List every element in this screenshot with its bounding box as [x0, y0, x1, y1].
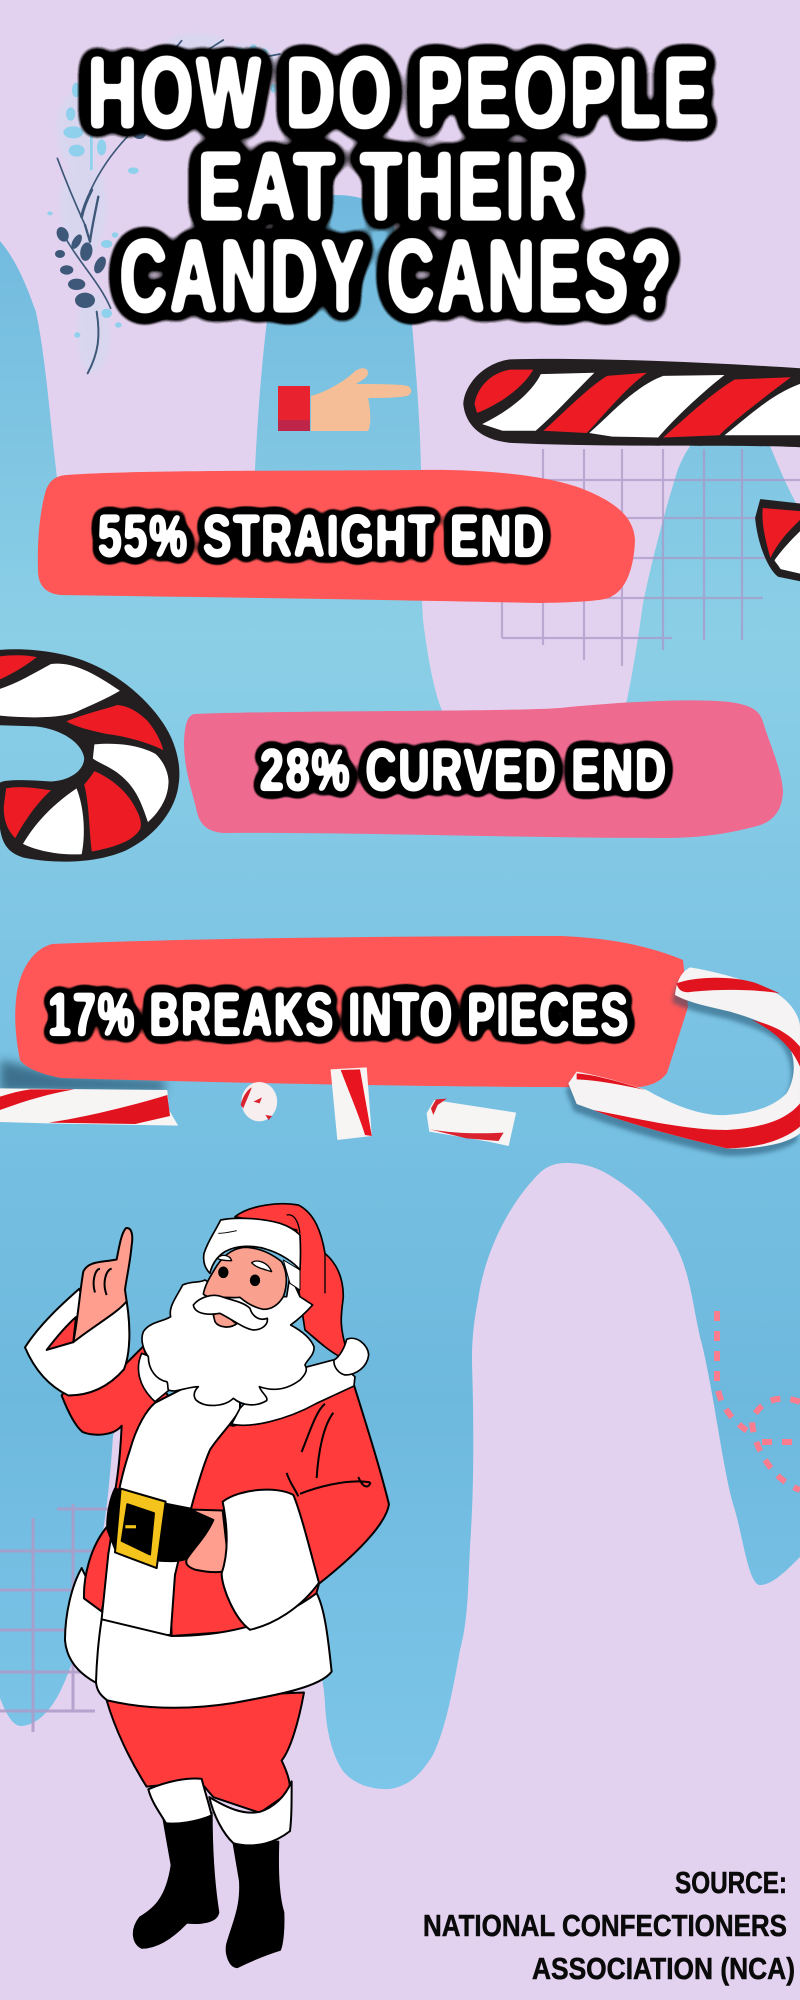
candy piece tilted — [427, 1099, 516, 1146]
eyebrows — [217, 1255, 272, 1272]
icon: candy cane fragment right — [755, 499, 800, 581]
item text: 55% straight end: 55% STRAIGHT END — [98, 504, 546, 569]
title — [88, 37, 712, 333]
left hem fur — [65, 1568, 107, 1683]
title: EAT THEIR — [198, 133, 580, 240]
buckle — [115, 1489, 166, 1568]
right collar — [232, 1360, 355, 1425]
sleeve cuff — [222, 1490, 319, 1630]
Santa body — [25, 1228, 389, 1967]
beard — [142, 1275, 314, 1405]
hand on belt — [186, 1509, 234, 1572]
Santa head — [138, 1204, 369, 1425]
grid pattern lower left — [0, 1504, 110, 1732]
right boot — [227, 1842, 283, 1967]
eyes — [219, 1267, 228, 1277]
mustache — [193, 1295, 267, 1330]
blue dripping background shape — [0, 195, 800, 1789]
photo: broken candy cane pieces — [0, 1067, 516, 1146]
white coat front — [100, 1387, 240, 1635]
panel: bar 28% — [184, 700, 783, 838]
left boot cuff — [148, 1779, 212, 1824]
shadow above candy stick — [0, 1060, 165, 1092]
icon: pointing hand — [278, 368, 411, 431]
raised arm cuff — [25, 1289, 129, 1395]
left collar — [138, 1353, 173, 1402]
sleeve folds — [287, 1404, 371, 1496]
panel: bar 17% — [15, 936, 688, 1087]
illustration: Santa Claus — [25, 1204, 389, 1967]
mouth — [213, 1313, 237, 1327]
grid pattern top right — [502, 449, 800, 666]
panel: bar 55% — [38, 470, 635, 603]
raised hand — [73, 1228, 132, 1342]
icon: straight candy cane top — [463, 359, 800, 447]
source note — [423, 1865, 795, 1986]
trousers — [107, 1693, 304, 1813]
candy piece upright — [331, 1067, 372, 1140]
photo: candy cane hook — [566, 967, 800, 1156]
icon: curved candy cane left — [0, 649, 179, 862]
dashed pink loops — [717, 1311, 800, 1490]
candy stick left — [0, 1088, 178, 1126]
hat — [235, 1204, 347, 1358]
pompom — [334, 1338, 369, 1375]
coat red body and arms — [62, 1346, 389, 1636]
candy piece round — [241, 1082, 277, 1121]
face — [203, 1247, 286, 1309]
left boot — [134, 1813, 218, 1948]
hat band — [204, 1218, 300, 1273]
coat hem fur — [96, 1593, 332, 1708]
hair side — [283, 1260, 300, 1290]
belt — [107, 1489, 213, 1561]
item text: 28% curved end: 28% CURVED END — [260, 738, 668, 803]
foliage decoration — [47, 33, 280, 373]
right boot cuff — [209, 1781, 292, 1845]
